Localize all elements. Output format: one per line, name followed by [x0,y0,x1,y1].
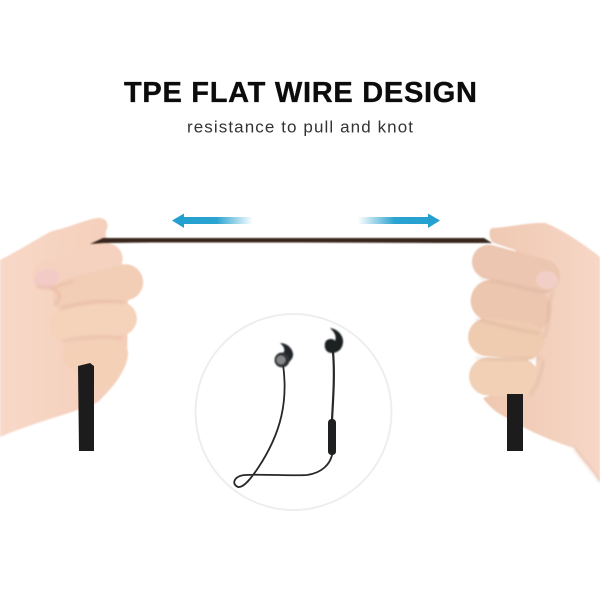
right hand gripping wire [466,223,600,482]
left thumbnail [32,266,62,290]
flat wire [90,238,492,244]
left hand gripping wire [0,218,147,437]
arrow: pull right [358,214,440,228]
right finger 2 [466,276,556,335]
finger creases left [36,281,125,342]
right finger 4 [468,357,540,397]
finger creases right [476,278,553,395]
left finger 2 [49,260,147,318]
right thumbnail [535,269,559,291]
left finger 4 [62,337,128,394]
wrist shadow [574,448,600,482]
left finger 3 [47,300,139,344]
neckband cable [234,352,334,487]
earphones [234,328,343,487]
inline remote control [328,419,336,455]
right palm and thumb [483,223,600,482]
arrow: pull left [172,214,253,228]
left palm and thumb [0,218,128,437]
left earbud [274,343,293,368]
right black cable [507,394,523,451]
right finger 1 [468,241,564,297]
product circle [196,314,392,510]
left black cable [78,363,94,451]
title: TPE FLAT WIRE DESIGN [124,77,477,109]
right earbud [325,328,343,353]
subtitle: resistance to pull and knot [187,118,413,136]
left finger 1 [28,240,126,295]
right finger 3 [466,316,546,362]
